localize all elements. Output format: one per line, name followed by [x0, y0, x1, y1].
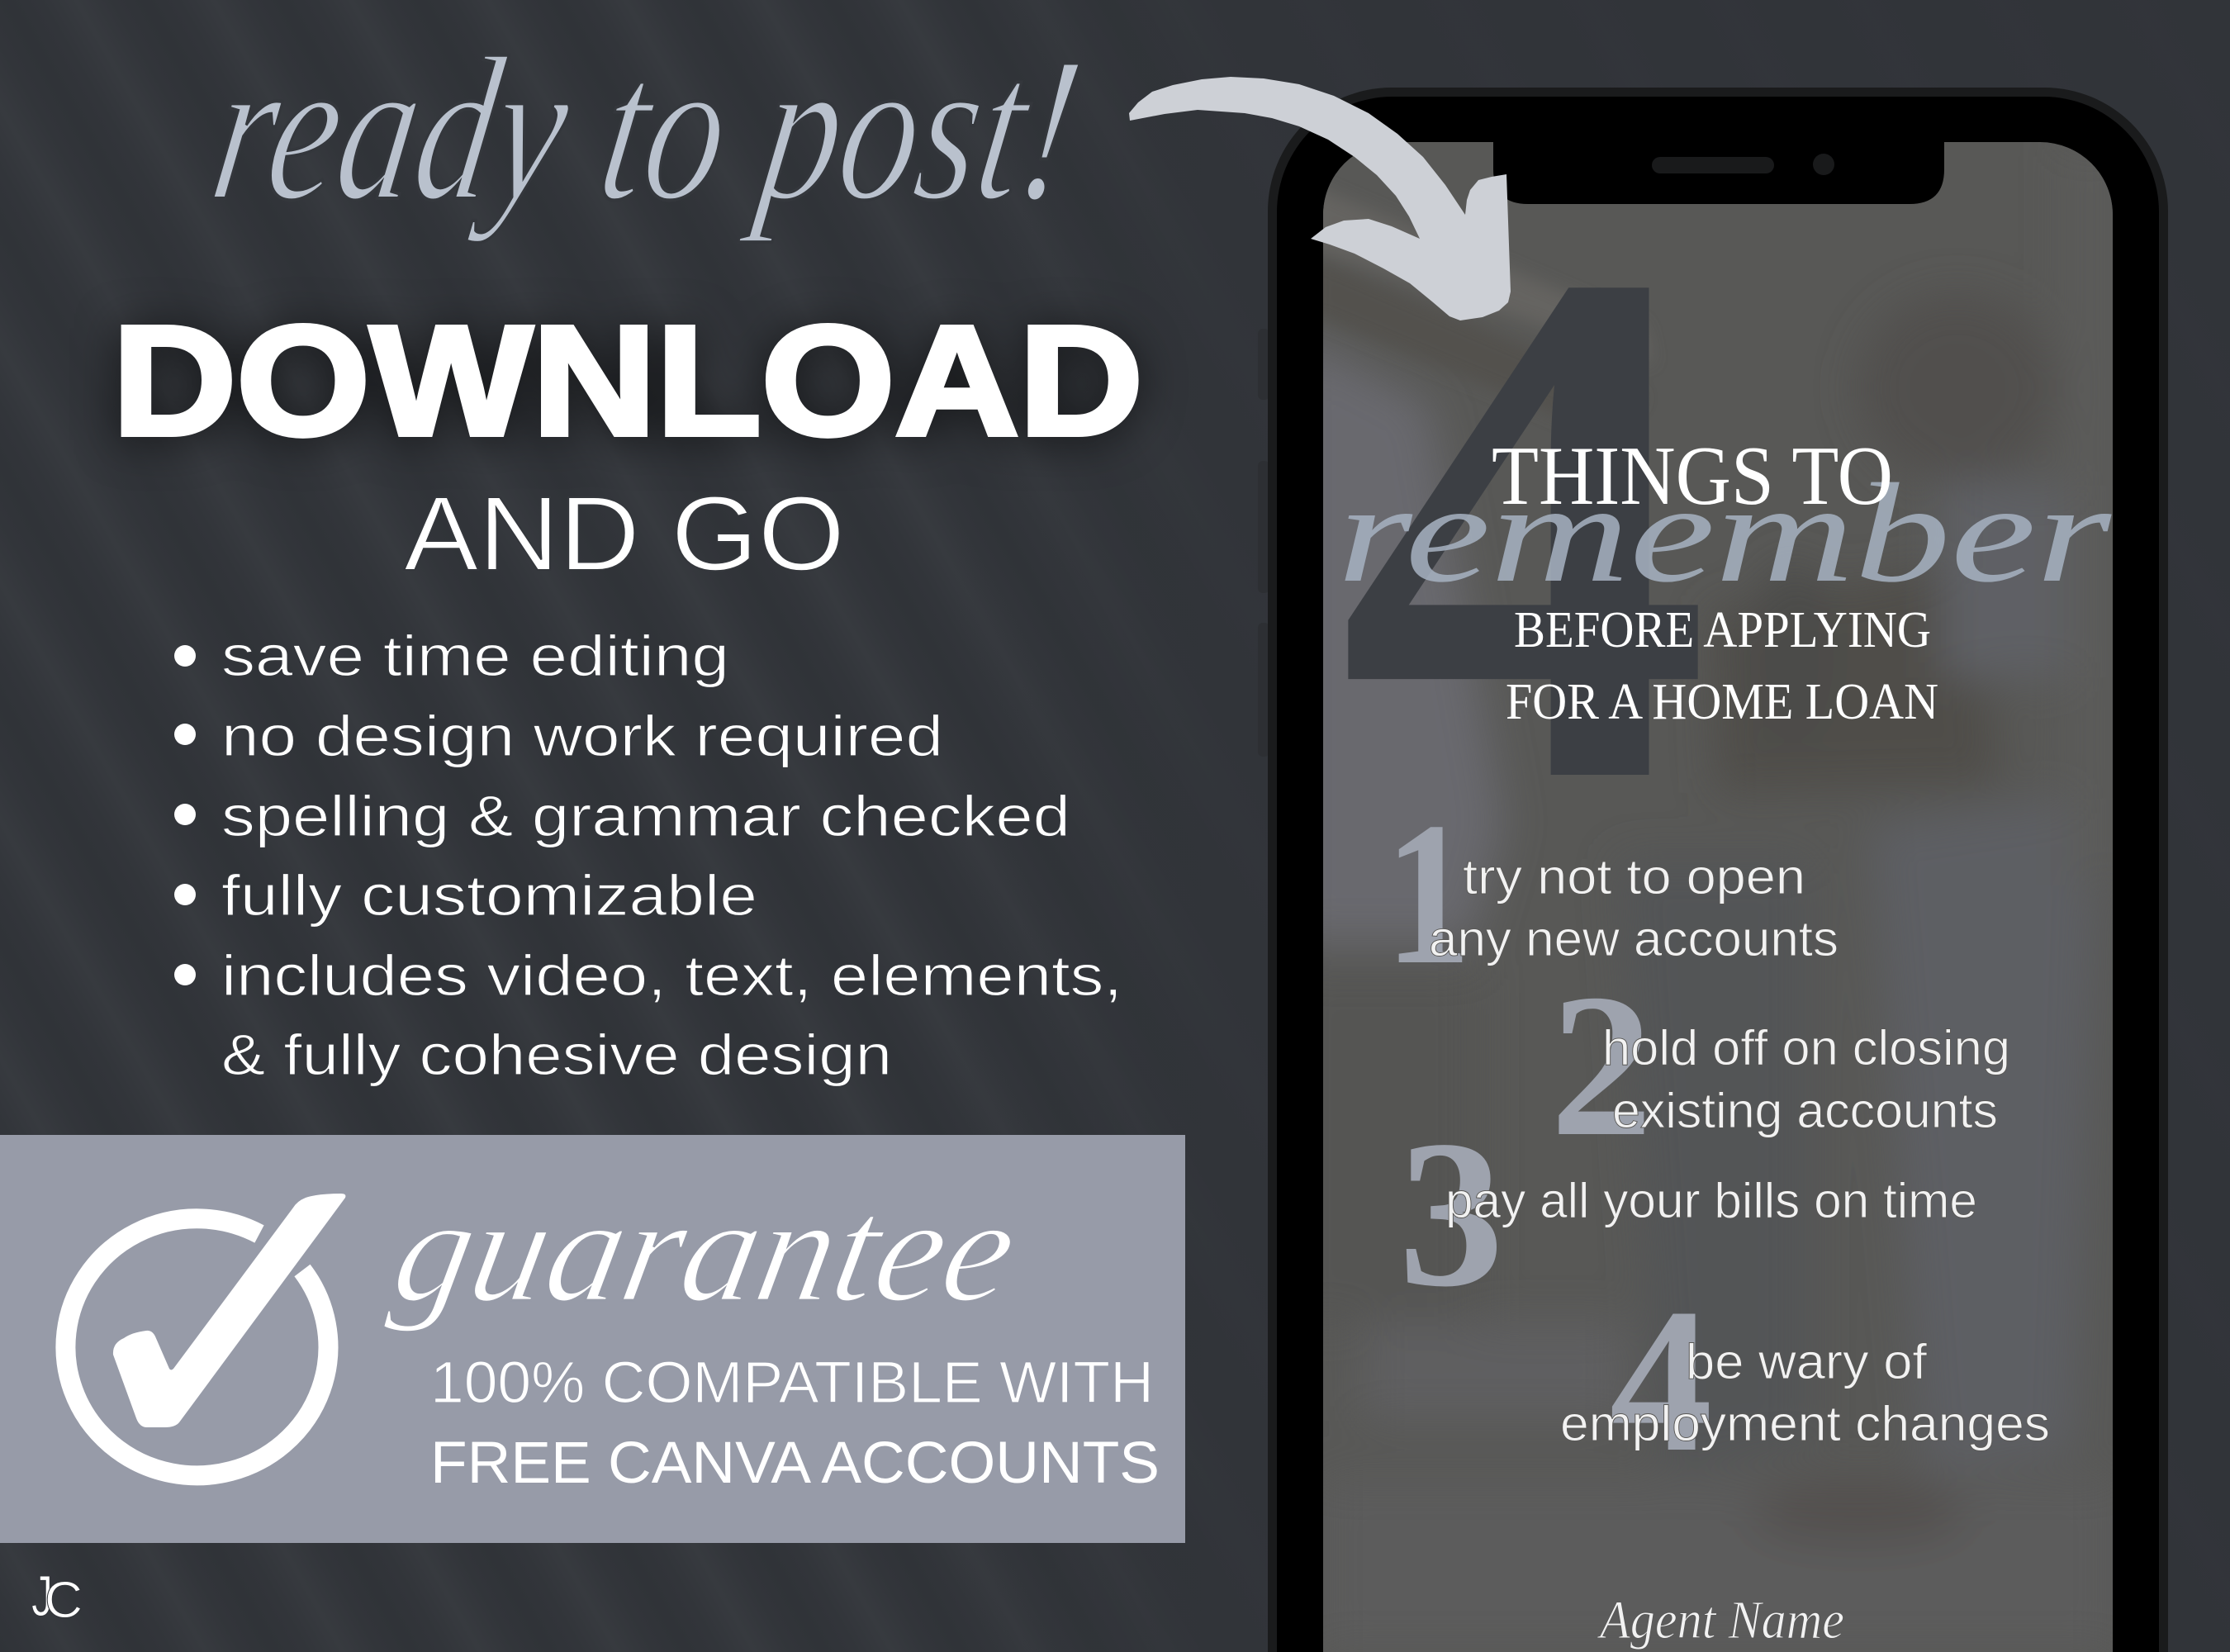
script title: guarantee: guarantee: [382, 1166, 1029, 1332]
screen title: [1337, 430, 2112, 730]
big numeral 4: 4: [1338, 116, 1711, 935]
list item 2: 2: [1550, 952, 1653, 1179]
list item 3: [1398, 1098, 1977, 1331]
list item 1: 1: [1385, 780, 1471, 1007]
bullet list of benefits: fully customizable: [221, 863, 757, 928]
list item 2: [1550, 952, 2010, 1179]
screen: blurred photo: [1288, 142, 2114, 1652]
camera: [1813, 154, 1834, 175]
heading: ready to post: ready to post!: [199, 15, 1094, 243]
list item 4: 4: [1609, 1266, 1713, 1495]
list item 1: try not to open: [1463, 849, 1805, 904]
signature: agent name: Agent Name: [1597, 1590, 1844, 1650]
heading: download: DOWNLOAD: [112, 294, 1143, 468]
bullet list of benefits: save time editing: [221, 624, 729, 688]
icon: check mark in circle: [65, 1194, 345, 1475]
text: compatibility line 2: FREE CANVA ACCOUNTS: [430, 1431, 1160, 1496]
logo: JC monogram: J: [31, 1564, 53, 1628]
arrow: [1129, 77, 1511, 320]
side buttons: [1258, 329, 1269, 757]
bullet list of benefits: [174, 624, 1122, 1087]
text: compatibility line 1: 100% COMPATIBLE WITH: [430, 1351, 1154, 1416]
logo: JC monogram: C: [45, 1572, 83, 1629]
bullet list of benefits: no design work required: [221, 704, 943, 768]
panel: phone mockup: [1258, 88, 2168, 1652]
panel: guarantee: [0, 1135, 1185, 1543]
phone body: [1268, 88, 2168, 1652]
speaker: [1652, 157, 1774, 173]
list item 1: [1385, 780, 1839, 1007]
logo: JC monogram: [31, 1564, 83, 1629]
list item 3: 3: [1398, 1098, 1504, 1331]
notch: [1493, 124, 1944, 204]
screen title: FOR A HOME LOAN: [1506, 674, 1938, 730]
list item 4: be wary of: [1686, 1334, 1927, 1389]
list item 2: hold off on closing: [1602, 1020, 2010, 1075]
screen title: remember: [1337, 455, 2112, 612]
screen title: THINGS TO: [1492, 430, 1893, 523]
list item 2: existing accounts: [1612, 1083, 1998, 1138]
list item 4: employment changes: [1560, 1396, 2050, 1451]
bullet list of benefits: spelling & grammar checked: [221, 784, 1070, 848]
list item 4: [1560, 1266, 2050, 1495]
list item 1: any new accounts: [1429, 911, 1839, 966]
subheading: and go: AND GO: [404, 475, 845, 593]
list item 3: pay all your bills on time: [1445, 1173, 1977, 1228]
screen title: BEFORE APPLYING: [1514, 602, 1931, 658]
bullet list of benefits: includes video, text, elements,: [221, 943, 1122, 1008]
bullet list of benefits: & fully cohesive design: [221, 1023, 892, 1087]
